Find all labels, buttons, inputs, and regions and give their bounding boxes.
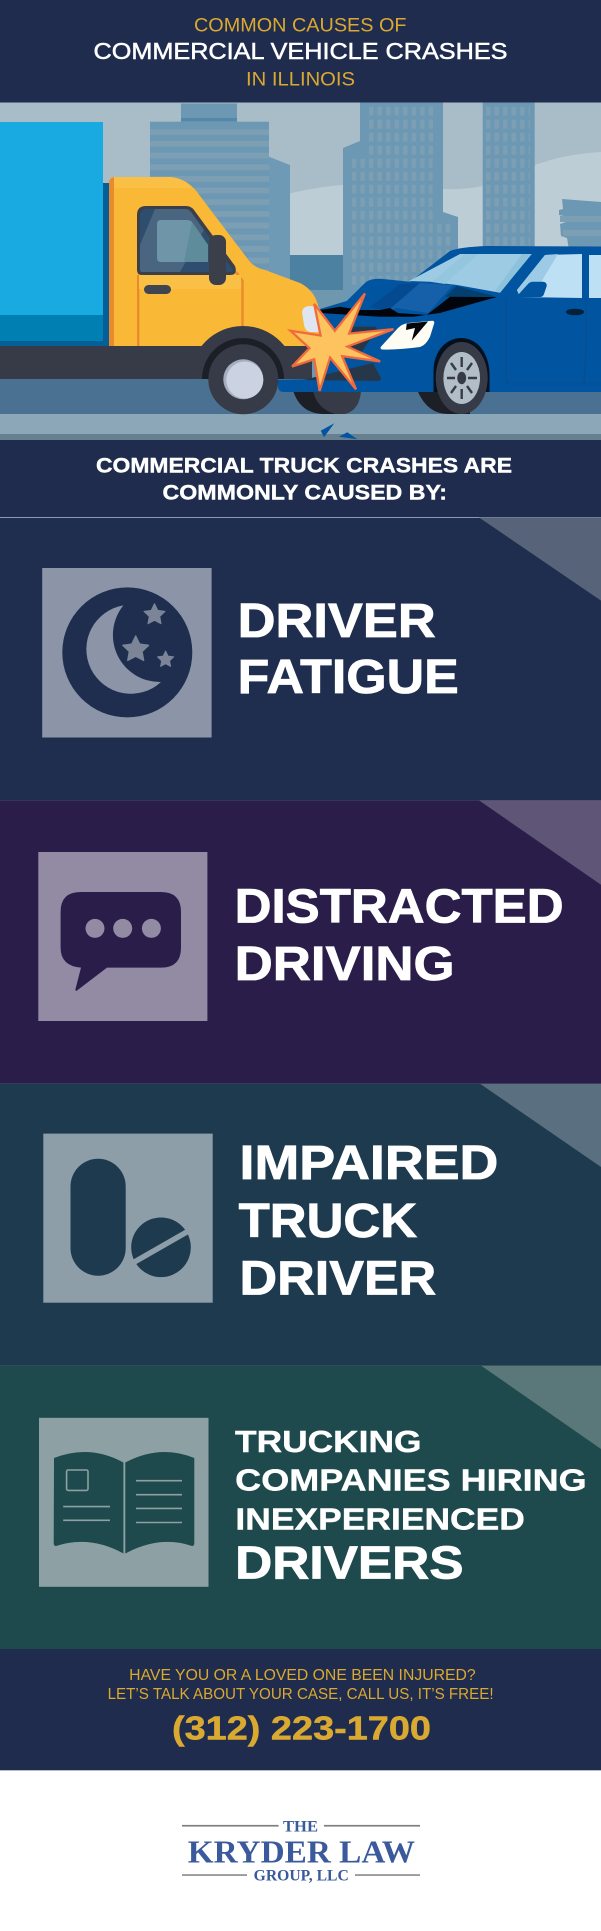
panel heading: driver fatigue [238,595,459,704]
call to action text: HAVE YOU OR A LOVED ONE BEEN INJURED? [129,1667,476,1684]
icon: speech bubble [38,852,207,1021]
logo: the kryder law group: GROUP, LLC [254,1867,349,1884]
icon: moon and stars [42,568,212,738]
subheading band [0,440,601,517]
road [0,379,601,440]
panel: distracted driving [0,800,601,1084]
debris [321,423,357,439]
call to action text: LET’S TALK ABOUT YOUR CASE, CALL US, IT’S FREE! [108,1686,494,1703]
phone number: (312) 223-1700 [172,1709,431,1746]
truck front wheel [190,326,296,414]
subheading line 1: COMMERCIAL TRUCK CRASHES ARE [96,454,512,477]
cab window [137,206,236,275]
city skyline background [0,102,601,382]
side windows [517,254,601,298]
truck cargo box [0,122,109,348]
footer: call to action [0,1649,601,1770]
logo: the kryder law group [0,1770,601,1931]
car rear wheel [418,338,490,414]
call to action text [108,1667,494,1703]
subheading line 2: COMMONLY CAUSED BY: [162,481,447,504]
grille and bumper [303,363,381,381]
panel: inexperienced drivers [0,1366,601,1649]
logo: the kryder law group: THE [283,1819,318,1836]
car [278,246,601,414]
car headlight [381,321,434,350]
panel heading: distracted driving: DISTRACTED [235,880,564,934]
panel heading: distracted driving [235,880,564,991]
title line: in illinois: IN ILLINOIS [246,70,355,91]
panel heading: impaired truck driver [239,1137,498,1306]
truck cab [109,177,322,346]
logo: the kryder law group: KRYDER LAW [188,1833,415,1869]
cab mirror [209,235,226,285]
header: title [0,0,601,102]
car front wheel [293,390,361,414]
icon: pills [43,1134,213,1303]
crumpled hood [320,283,497,317]
panel heading: driver fatigue: FATIGUE [238,651,459,704]
panel heading: impaired truck driver: TRUCK [239,1195,417,1248]
panel heading: driver fatigue: DRIVER [238,595,436,648]
truck chassis [0,346,312,379]
panel heading: trucking companies hiring inexperienced drivers: COMPANIES HIRING [235,1463,587,1498]
door handle [566,309,584,315]
truck headlight [302,306,322,332]
panel heading: trucking companies hiring inexperienced drivers: TRUCKING [235,1424,422,1459]
panel heading: trucking companies hiring inexperienced drivers: DRIVERS [235,1536,464,1588]
illustration: truck and car collision [0,102,601,440]
panel heading: trucking companies hiring inexperienced drivers: INEXPERIENCED [235,1502,525,1536]
panel heading: distracted driving: DRIVING [235,938,455,991]
title line: commercial vehicle crashes: COMMERCIAL VEHICLE CRASHES [94,38,508,64]
panel heading: trucking companies hiring inexperienced drivers [235,1424,587,1588]
panel heading: impaired truck driver: IMPAIRED [240,1137,498,1190]
door outline [506,298,601,384]
car side mirror [518,282,547,297]
panel: impaired truck driver [0,1084,601,1366]
windshield [409,254,532,293]
impact star [290,293,393,391]
panel: driver fatigue [0,517,601,800]
title line: common causes of: COMMON CAUSES OF [194,16,406,37]
door handle [144,285,171,294]
car body [278,246,601,392]
panel heading: impaired truck driver: DRIVER [240,1253,436,1306]
icon: open book [39,1418,208,1587]
